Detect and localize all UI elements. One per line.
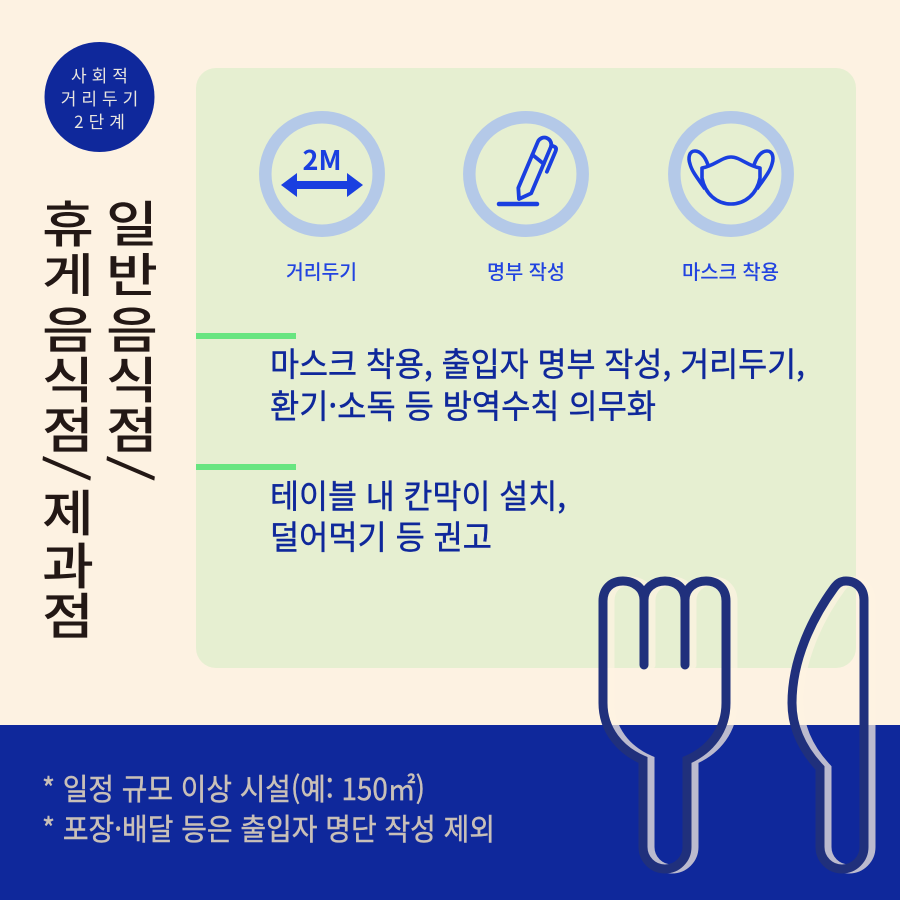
heading: vertical title column left: 과 [42, 528, 94, 599]
text block: mandatory rules [270, 338, 805, 428]
footnotes: * 포장·배달 등은 출입자 명단 작성 제외 [42, 805, 495, 849]
heading: vertical title column right [95, 186, 172, 484]
badge: social distancing level 2 [44, 42, 154, 152]
heading: vertical title column left: 음 [42, 292, 94, 363]
heading: vertical title column right: 음 [106, 292, 158, 363]
text block: mandatory rules: 마스크 착용, 출입자 명부 작성, 거리두기, [270, 338, 805, 386]
icon: 2M distancing [265, 117, 379, 231]
heading: vertical title column right: 점 [106, 392, 158, 463]
panel: blue footer band [0, 725, 900, 900]
text block: recommended rules [270, 470, 566, 559]
heading: vertical title column left [31, 186, 108, 649]
label: distancing: 거리두기 [286, 256, 357, 285]
heading: vertical title column left: 점 [42, 578, 94, 649]
icon: fork [603, 581, 733, 869]
heading: vertical title column left: / [31, 454, 108, 484]
heading: vertical title column left: 휴 [42, 186, 94, 257]
accent bar 2 [196, 464, 296, 470]
heading: vertical title column left: 게 [42, 238, 94, 306]
heading: vertical title column right: 일 [106, 186, 158, 257]
icon: face mask [674, 117, 788, 231]
text block: recommended rules: 테이블 내 칸막이 설치, [270, 470, 566, 518]
icon: pen signing [469, 117, 583, 231]
text block: recommended rules: 덜어먹기 등 권고 [270, 511, 492, 559]
badge: social distancing level 2: 사회적 [71, 62, 133, 87]
heading: vertical title column right: / [95, 454, 172, 484]
badge: social distancing level 2: 2단계 [74, 108, 130, 133]
heading: vertical title column right: 식 [106, 342, 158, 413]
text block: mandatory rules: 환기·소독 등 방역수칙 의무화 [270, 380, 656, 428]
icon: 2M distancing: 2M [303, 139, 341, 178]
label: signing: 명부 작성 [487, 256, 565, 285]
footnotes [42, 765, 495, 849]
label: mask: 마스크 착용 [682, 256, 779, 285]
footnotes: * 일정 규모 이상 시설(예: 150㎡) [42, 765, 425, 809]
heading: vertical title column right: 반 [106, 238, 158, 306]
panel: green guidelines panel [196, 68, 856, 668]
icon: knife [792, 581, 871, 869]
accent bar 1 [196, 333, 296, 339]
heading: vertical title column left: 식 [42, 342, 94, 413]
heading: vertical title column left: 제 [42, 475, 94, 546]
heading: vertical title column left: 점 [42, 392, 94, 463]
badge: social distancing level 2: 거리두기 [61, 85, 143, 110]
